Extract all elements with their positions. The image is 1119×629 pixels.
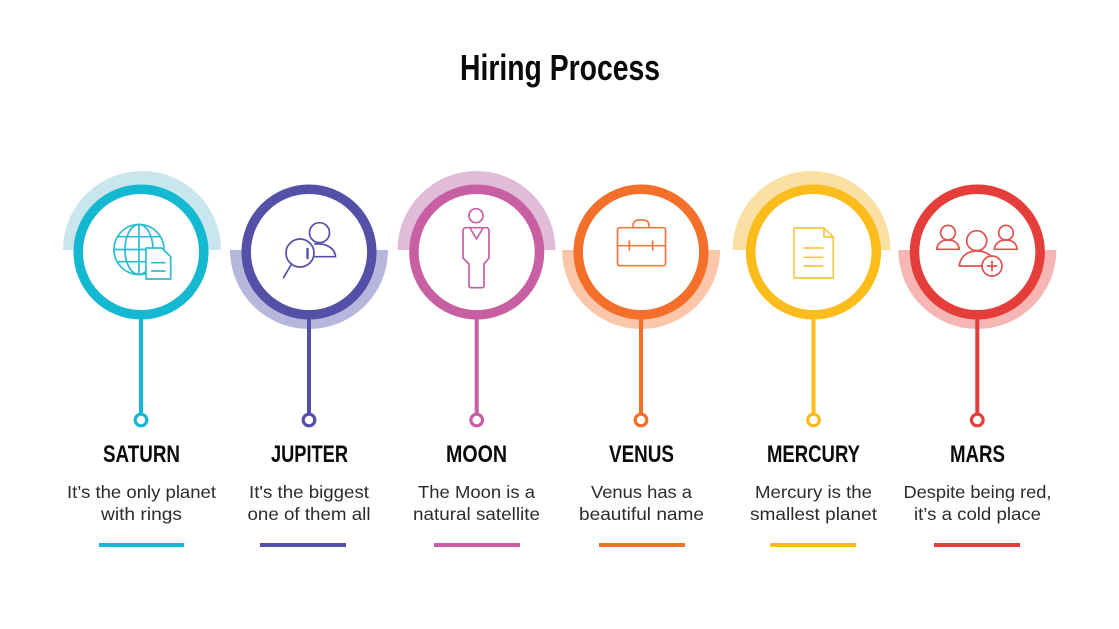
main circle: Saturn: [78, 189, 204, 315]
description: Venus: Venus has a: [591, 482, 692, 502]
connector line: Jupiter: [307, 315, 311, 413]
main circle: Mercury: [751, 189, 876, 315]
description: Venus: beautiful name: [579, 504, 704, 524]
half ring: Saturn: [63, 171, 221, 250]
step: Jupiter: [230, 189, 388, 547]
end dot: Moon: [471, 414, 483, 426]
description: Jupiter: It's the biggest: [249, 482, 369, 502]
end dot: Jupiter: [303, 414, 315, 426]
description: Mars: Despite being red,: [904, 482, 1052, 502]
connector line: Mercury: [812, 315, 816, 413]
step: Mars: [898, 189, 1056, 547]
description: Moon: The Moon is a: [418, 482, 535, 502]
step: Venus: [562, 189, 720, 547]
icon: group with plus: [937, 225, 1017, 276]
heading: Jupiter: JUPITER: [271, 441, 348, 468]
icon: briefcase: [618, 220, 666, 266]
description: Jupiter: [248, 482, 370, 524]
end dot: Mars: [972, 414, 983, 426]
accent bar: Jupiter: [260, 543, 346, 547]
accent bar: Moon: [434, 543, 520, 547]
accent bar: Mercury: [770, 543, 856, 547]
main circle: Venus: [578, 189, 704, 315]
step: Saturn: [63, 171, 221, 547]
main circle: Jupiter: [246, 189, 372, 315]
heading: Saturn: SATURN: [103, 441, 180, 468]
description: Saturn: with rings: [100, 504, 182, 524]
description: Moon: [413, 482, 540, 524]
half ring: Moon: [398, 171, 556, 250]
description: Saturn: [67, 482, 216, 524]
half ring: Jupiter: [230, 250, 388, 329]
description: Venus: [579, 482, 704, 524]
heading: Mercury: MERCURY: [767, 441, 860, 468]
description: Mercury: [750, 482, 877, 524]
half ring: Mars: [898, 250, 1056, 329]
end dot: Mercury: [808, 414, 819, 426]
accent bar: Venus: [599, 543, 685, 547]
main circle: Mars: [914, 189, 1040, 315]
icon: document: [794, 228, 833, 278]
description: Saturn: It’s the only planet: [67, 482, 216, 502]
description: Mercury: Mercury is the: [755, 482, 872, 502]
half ring: Venus: [562, 250, 720, 329]
end dot: Saturn: [135, 414, 147, 426]
icon: globe with document: [114, 224, 171, 279]
title: Hiring Process: [460, 47, 660, 88]
half ring: Mercury: [732, 171, 890, 250]
description: Mercury: smallest planet: [750, 504, 877, 524]
step: Mercury: [732, 171, 890, 547]
heading: Venus: VENUS: [609, 441, 674, 468]
heading: Moon: MOON: [446, 441, 507, 468]
description: Jupiter: one of them all: [248, 504, 370, 524]
step: Moon: [398, 171, 556, 547]
description: Mars: it’s a cold place: [914, 504, 1041, 524]
icon: standing person: [463, 209, 489, 288]
connector line: Moon: [475, 315, 479, 413]
connector line: Mars: [975, 315, 979, 413]
description: Mars: [904, 482, 1052, 524]
accent bar: Saturn: [99, 543, 184, 547]
description: Moon: natural satellite: [413, 504, 540, 524]
end dot: Venus: [635, 414, 647, 426]
main circle: Moon: [414, 189, 540, 315]
accent bar: Mars: [934, 543, 1020, 547]
connector line: Saturn: [139, 315, 143, 413]
connector line: Venus: [639, 315, 643, 413]
icon: magnifier over person: [284, 223, 336, 278]
heading: Mars: MARS: [950, 441, 1005, 468]
